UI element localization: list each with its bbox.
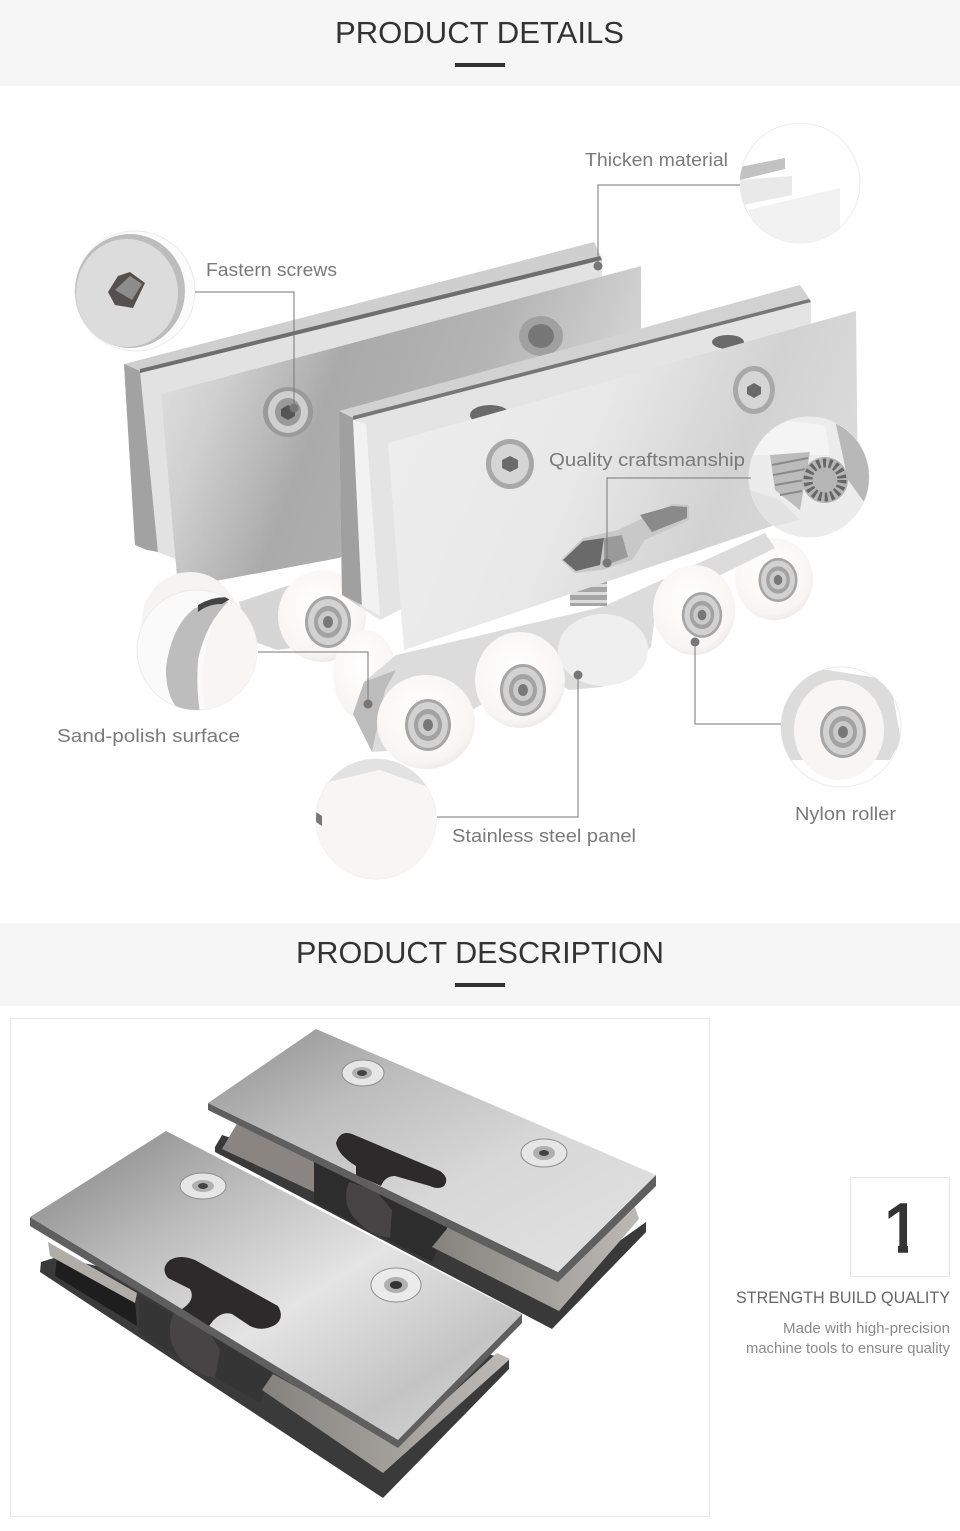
right clamp unit and rollers (333, 285, 858, 769)
callout lens: stainless steel panel (316, 759, 436, 880)
left roller set (142, 570, 366, 668)
number box (850, 1178, 950, 1276)
feature description: machine tools to ensure quality (746, 1341, 951, 1357)
label: nylon roller: Nylon roller (795, 804, 896, 824)
label: quality craftsmanship: Quality craftsmanship (549, 450, 745, 470)
feature description (746, 1321, 951, 1357)
callout lens: thicken material (740, 123, 860, 250)
screws (180, 1173, 421, 1302)
slot (336, 1133, 446, 1188)
panel: clamp photo (10, 1018, 710, 1516)
feature title: STRENGTH BUILD QUALITY (736, 1289, 950, 1307)
panel: product details header band (0, 0, 960, 86)
heading: product details: PRODUCT DETAILS (335, 15, 624, 50)
callout lens: nylon roller (781, 667, 901, 787)
panel: hardware photo with callouts (57, 123, 901, 880)
slot (561, 504, 689, 573)
label: thicken material: Thicken material (585, 150, 728, 170)
left clamp unit (124, 242, 641, 588)
number box: 1 (883, 1189, 921, 1267)
feature description: Made with high-precision (783, 1321, 950, 1337)
bracket (353, 533, 775, 752)
callout lens: fastern screws (75, 231, 195, 351)
lower clamp (30, 1131, 522, 1498)
front plate (388, 311, 858, 650)
label: stainless steel panel: Stainless steel panel (452, 826, 636, 846)
callout lens: quality craftsmanship (749, 417, 870, 537)
label: fastern screws: Fastern screws (206, 260, 337, 280)
plate screws (486, 366, 775, 489)
heading: product description: PRODUCT DESCRIPTION (296, 935, 664, 970)
panel: product description header band (0, 923, 960, 1006)
label: sand-polish surface: Sand-polish surface (57, 726, 240, 746)
leader lines and dots (195, 185, 781, 817)
callout lens: sand-polish surface (137, 590, 258, 712)
slot (164, 1257, 281, 1329)
upper clamp (208, 1029, 656, 1329)
nylon rollers (377, 565, 735, 769)
threaded bolt (570, 576, 607, 606)
screws (342, 1060, 567, 1167)
feature: strength build quality (736, 1178, 951, 1357)
screw: left clamp (263, 387, 313, 437)
